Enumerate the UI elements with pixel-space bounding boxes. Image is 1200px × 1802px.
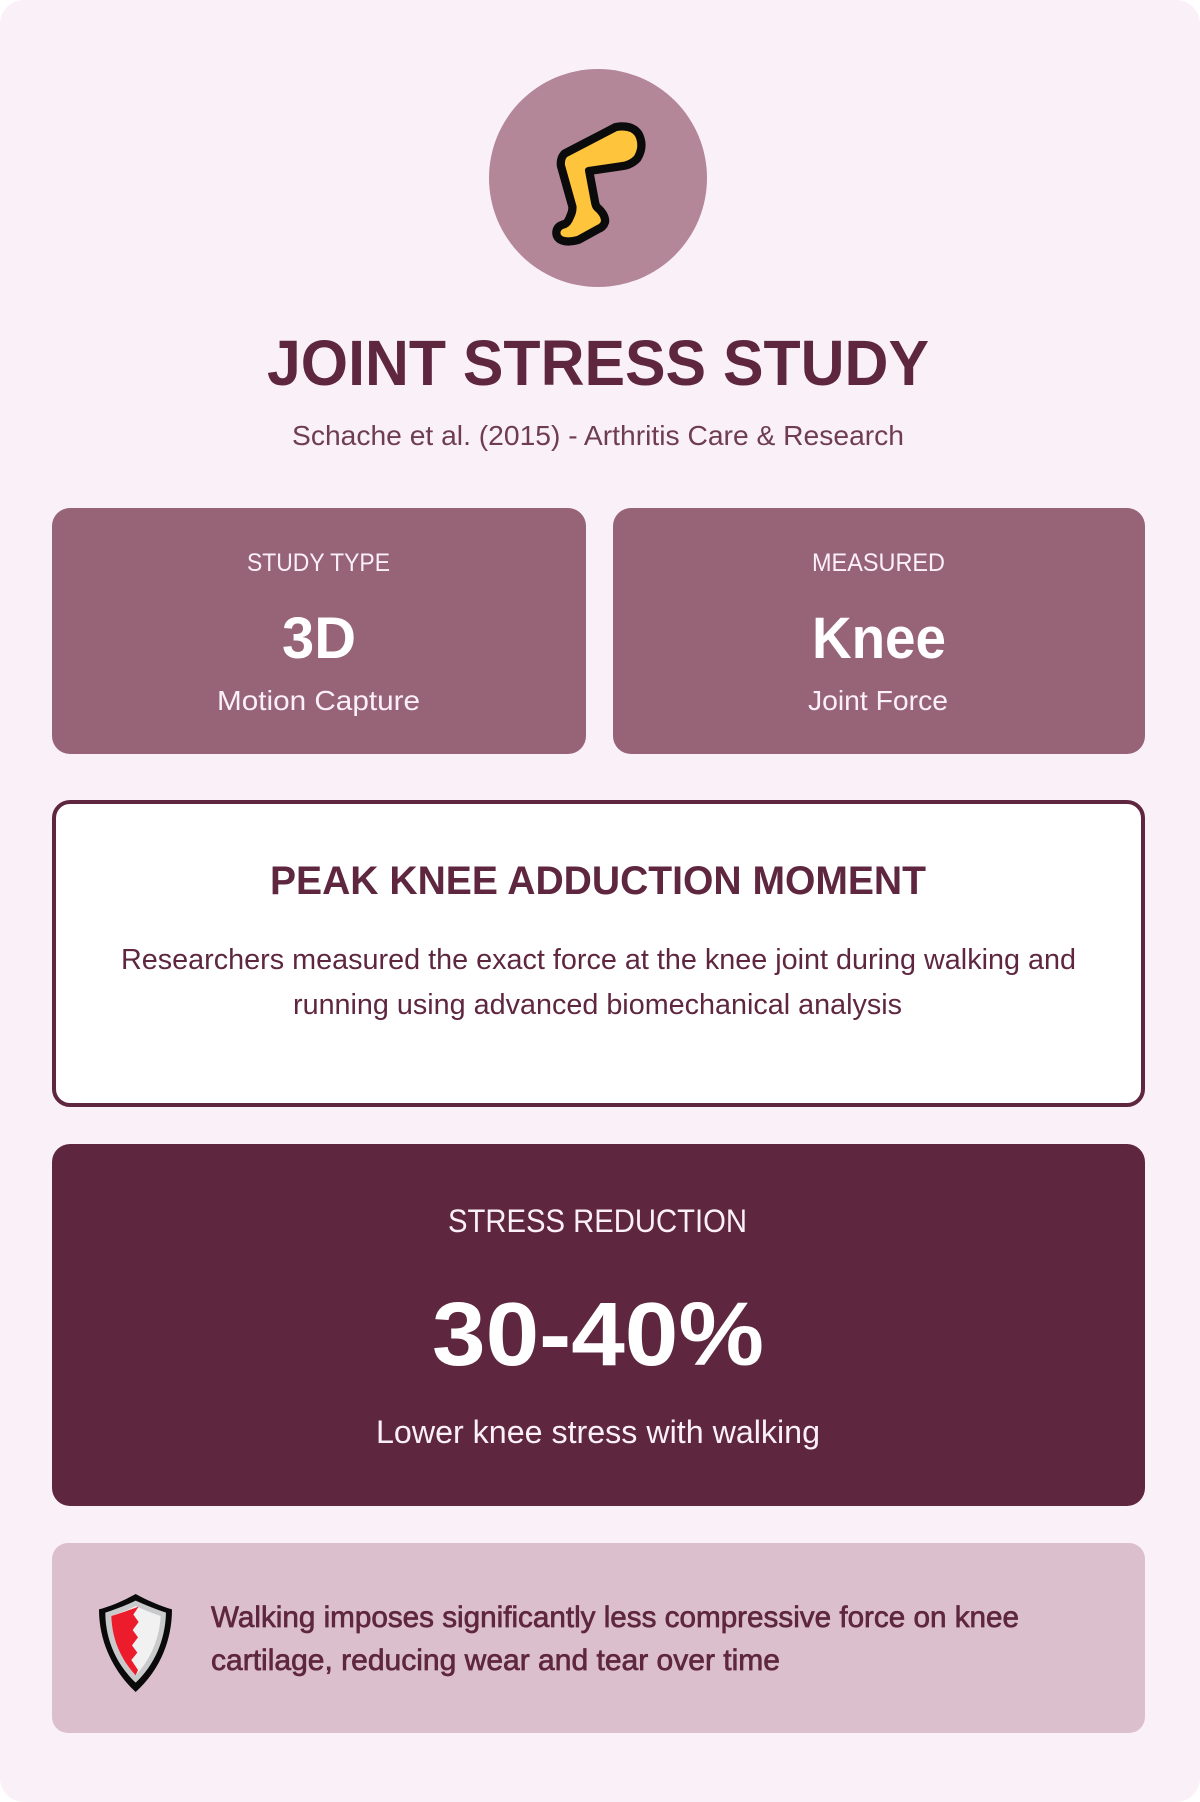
label: measured: MEASURED	[812, 549, 945, 577]
panel: study type	[52, 508, 586, 754]
value: knee: Knee	[812, 606, 946, 671]
caption: Lower knee stress with walking	[376, 1414, 820, 1450]
caption: motion capture: Motion Capture	[217, 685, 420, 716]
label: STRESS REDUCTION	[448, 1203, 747, 1239]
heading: PEAK KNEE ADDUCTION MOMENT	[270, 859, 926, 903]
big number: 30-40%	[432, 1285, 764, 1385]
description	[121, 944, 1076, 1021]
icon: shield	[99, 1594, 172, 1692]
description: Researchers measured the exact force at the knee joint during walking and	[121, 944, 1076, 976]
panel: peak knee adduction moment	[54, 802, 1143, 1105]
icon: leg in circle	[489, 69, 707, 287]
subtitle: Schache et al. (2015) - Arthritis Care & Research	[292, 420, 904, 451]
caption: joint force: Joint Force	[808, 685, 948, 716]
panel: key takeaway	[52, 1543, 1145, 1733]
label: study type: STUDY TYPE	[247, 549, 390, 577]
title: JOINT STRESS STUDY	[267, 327, 929, 399]
takeaway text	[211, 1601, 1019, 1677]
panel: stress reduction	[52, 1144, 1145, 1506]
takeaway text: Walking imposes significantly less compressive force on knee	[211, 1601, 1019, 1634]
description: running using advanced biomechanical analysis	[293, 989, 902, 1021]
panel: measured	[613, 508, 1145, 754]
takeaway text: cartilage, reducing wear and tear over time	[211, 1644, 780, 1677]
value: 3D: 3D	[282, 606, 356, 671]
